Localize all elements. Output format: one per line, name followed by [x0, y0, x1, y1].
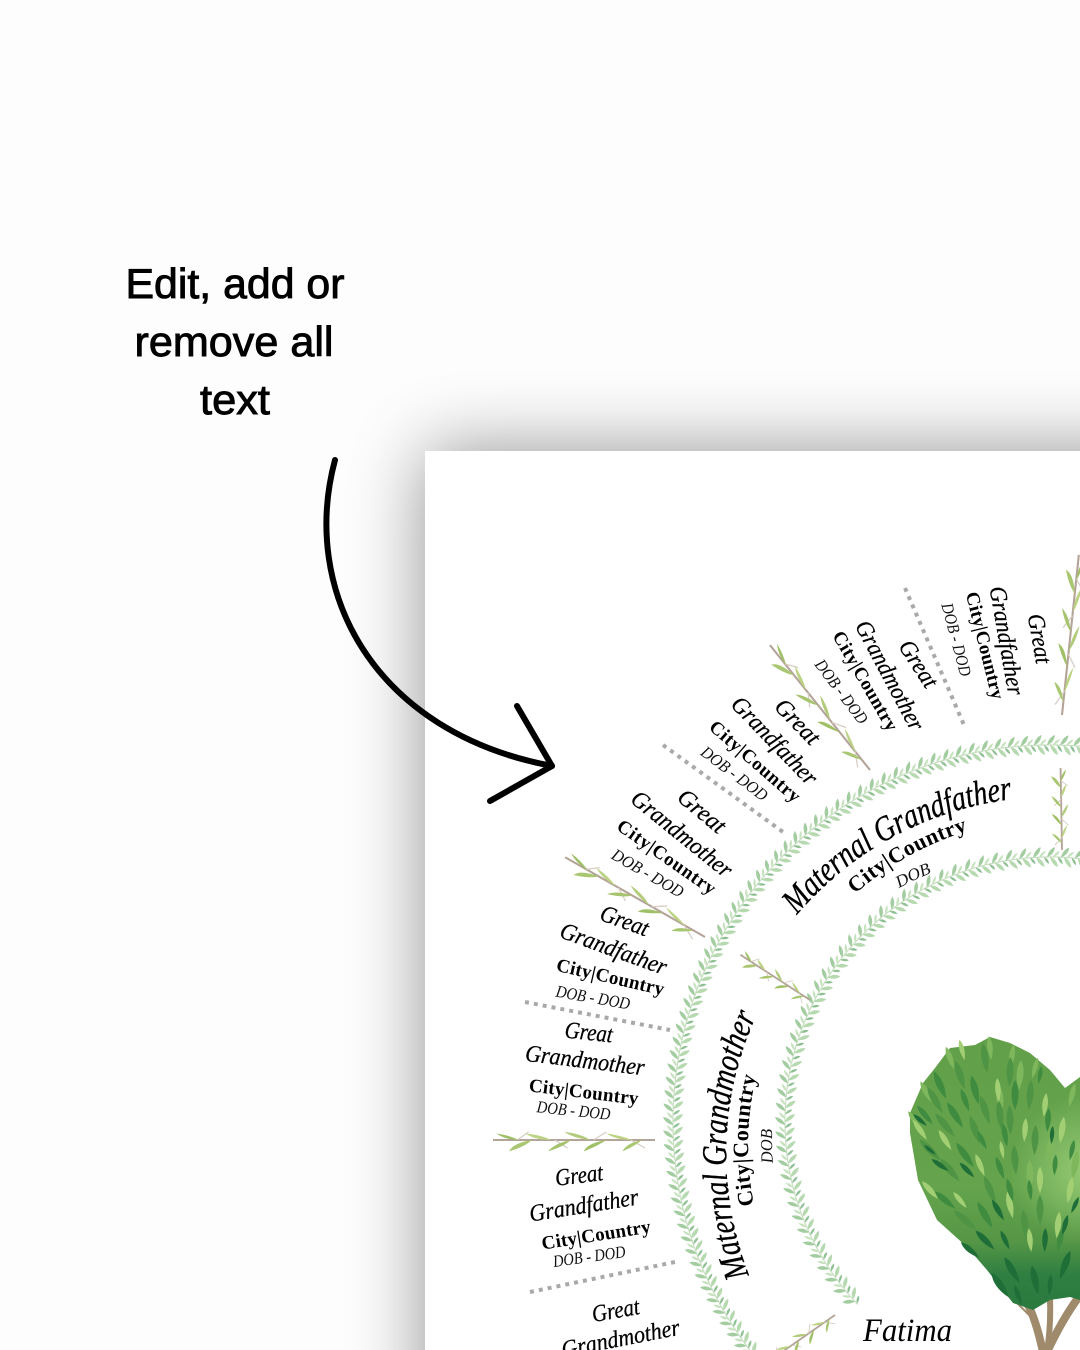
arrow: curved pointer to the sheet [326, 460, 552, 801]
text: great grandfather, left lower [528, 1160, 653, 1271]
text: great grandmother, upper: City|Country [828, 628, 902, 735]
text: great grandfather, top: Grandfather [984, 584, 1028, 698]
text: great grandfather, top: Great [1022, 612, 1056, 667]
text: great grandfather, upper left: City|Country [705, 717, 805, 807]
divider lines [525, 588, 964, 1292]
text: maternal grandmother: City|Country [733, 1074, 759, 1206]
heading: edit, add or remove all text: remove all [134, 318, 334, 365]
text: maternal grandfather: City|Country [849, 821, 964, 891]
text: great grandfather, left lower: City|Country [540, 1217, 653, 1255]
text: great grandfather, left lower: Great [554, 1160, 606, 1192]
text: maternal grandmother: DOB [760, 1129, 773, 1164]
text: great grandfather, left: City|Country [554, 955, 667, 1000]
text: fatima: Fatima [862, 1313, 952, 1349]
text: great grandfather, left [554, 901, 671, 1014]
inner leaf wreath [691, 777, 1080, 1311]
text: great grandfather, left: DOB - DOD [554, 982, 632, 1014]
text: great grandfather, left lower: Grandfather [528, 1185, 641, 1228]
text: great grandmother, left upper: Great [672, 784, 732, 840]
icon: heart tree [906, 1036, 1080, 1350]
text: maternal grandfather: Maternal Grandfather [782, 780, 1010, 916]
tree trunk [1016, 1298, 1078, 1350]
heading: edit, add or remove all text: text [200, 376, 270, 423]
text: great grandfather, top: City|Country [961, 590, 1008, 702]
tree crown [906, 1036, 1080, 1310]
text: great grandfather, top [937, 584, 1056, 702]
text: great grandmother, upper: DOB - DOD [810, 655, 872, 728]
text: maternal grandfather: DOB [896, 864, 930, 888]
text: great grandfather, upper left [696, 691, 826, 807]
text: great grandmother, left upper: Grandmother [625, 786, 738, 884]
text: great grandmother, bottom: Great [590, 1294, 643, 1328]
text: great grandmother, left middle: DOB - DOD [535, 1097, 612, 1124]
text: great grandmother, upper [810, 616, 944, 736]
text: great grandmother, left middle: Grandmother [524, 1041, 647, 1081]
text: great grandmother, left upper: DOB - DOD [608, 845, 688, 902]
outer leaf wreath [565, 600, 1080, 1350]
text: great grandmother, left middle: City|Country [528, 1075, 640, 1110]
text: great grandmother, upper: Great [893, 635, 944, 694]
text: great grandfather, top: DOB - DOD [937, 600, 975, 679]
text: great grandfather, upper left: DOB - DOD [696, 742, 772, 805]
text: maternal grandmother: Maternal Grandmother [702, 1009, 754, 1280]
panel: family tree paper sheet [425, 451, 1080, 1350]
heading: edit, add or remove all text [126, 260, 344, 423]
text: great grandmother, bottom [559, 1294, 683, 1350]
text: great grandfather, left: Great [596, 901, 653, 943]
text: great grandfather, upper left: Great [769, 694, 826, 752]
heading: edit, add or remove all text: Edit, add or [126, 260, 344, 307]
text: great grandfather, left lower: DOB - DOD [551, 1242, 627, 1271]
text: great grandfather, upper left: Grandfather [725, 691, 823, 791]
icon: twig sprigs [493, 554, 1080, 1350]
text: great grandmother, left middle: Great [564, 1018, 615, 1049]
text: great grandmother, left upper: City|Country [613, 816, 720, 900]
text: great grandmother, upper: Grandmother [849, 616, 929, 736]
text: great grandmother, left middle [524, 1018, 647, 1124]
text: great grandfather, left: Grandfather [556, 918, 671, 981]
